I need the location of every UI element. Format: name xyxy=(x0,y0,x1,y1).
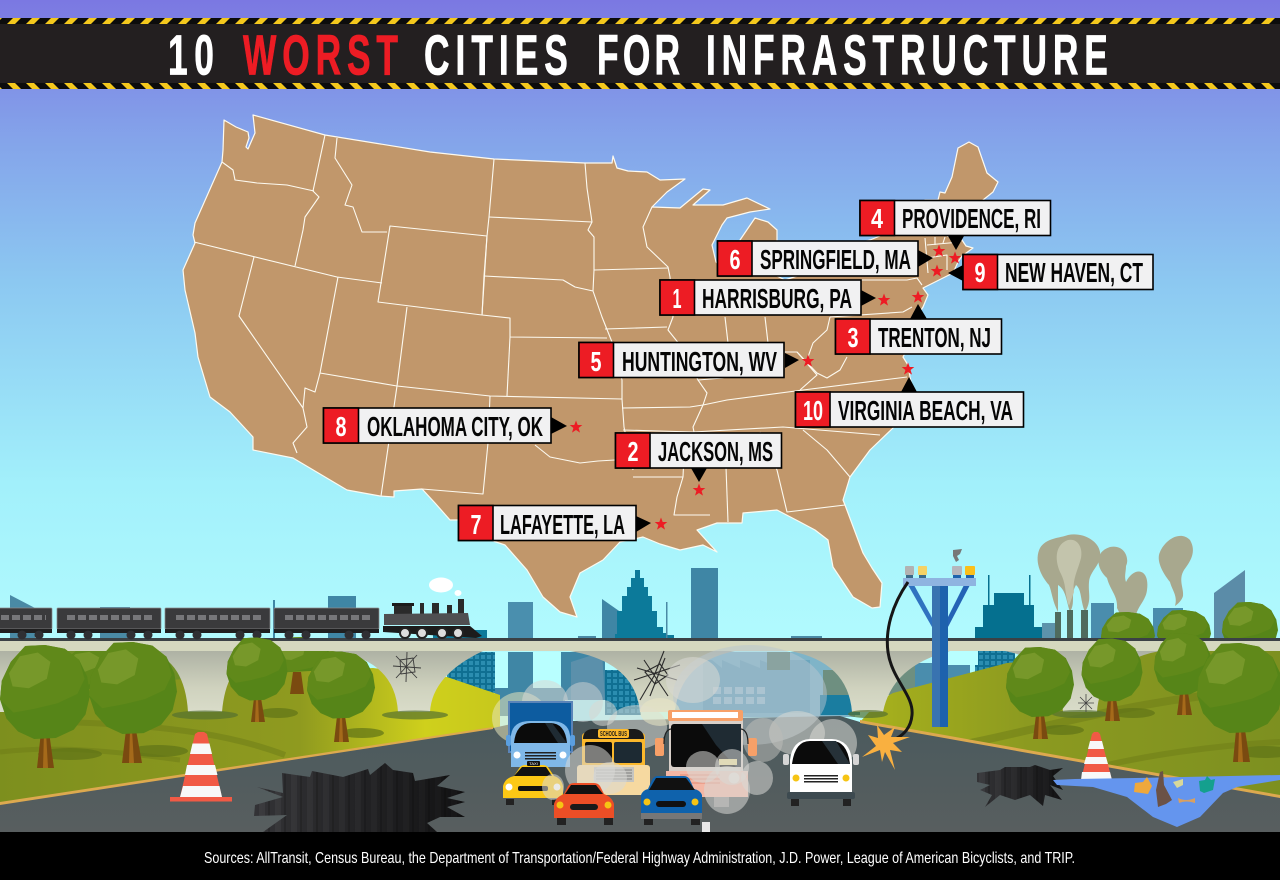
pier base shadows xyxy=(172,710,1108,720)
map of the contiguous United States xyxy=(183,115,998,617)
city label: 9 New Haven xyxy=(948,254,1153,290)
title text: 10 xyxy=(168,24,214,88)
right hillside xyxy=(860,640,1280,797)
yellow school bus xyxy=(577,729,650,795)
traffic cone right xyxy=(1073,732,1120,784)
road edge right xyxy=(860,720,1280,798)
pothole left xyxy=(254,763,465,832)
city label: 7 Lafayette xyxy=(458,506,651,540)
red star markers xyxy=(570,244,961,530)
city label: 7 Lafayette: 7 xyxy=(470,509,482,540)
left hillside xyxy=(0,668,500,806)
city label: 7 Lafayette: LAFAYETTE, LA xyxy=(500,509,625,540)
lane marks xyxy=(702,822,710,832)
tree 1 xyxy=(0,645,102,768)
traffic cone left xyxy=(170,732,232,802)
title text: CITIES xyxy=(424,24,568,88)
title text: INFRASTRUCTURE xyxy=(706,24,1108,88)
city label: 5 Huntington xyxy=(579,342,799,378)
factory silhouette in right arch xyxy=(703,660,810,713)
city label: 1 Harrisburg xyxy=(660,280,876,315)
city bus xyxy=(655,710,757,807)
carriage 2 xyxy=(57,608,161,640)
city label: 6 Springfield xyxy=(718,241,933,276)
tree 8 xyxy=(1197,643,1280,762)
tree 5 xyxy=(1006,647,1084,739)
city label: 8 Oklahoma City: 8 xyxy=(336,411,346,442)
city label: 10 Virginia Beach: VIRGINIA BEACH, VA xyxy=(838,395,1013,426)
title text: WORST xyxy=(243,24,398,88)
city label: 8 Oklahoma City: OKLAHOMA CITY, OK xyxy=(367,411,543,442)
hazard stripe top xyxy=(0,18,1280,24)
bridge deck xyxy=(0,641,1280,651)
carriage 3 xyxy=(165,608,270,640)
title text xyxy=(168,24,1108,88)
city label: 9 New Haven: NEW HAVEN, CT xyxy=(1005,257,1143,288)
city label: 3 Trenton: TRENTON, NJ xyxy=(878,322,991,353)
road xyxy=(0,716,1280,832)
tree 7 xyxy=(1154,633,1212,715)
background tree masses behind arches xyxy=(60,637,350,712)
steam locomotive xyxy=(383,599,482,638)
city label: 4 Providence: 4 xyxy=(871,203,883,234)
tree 6 xyxy=(1082,638,1155,721)
crack on right pier xyxy=(1078,694,1094,712)
city label: 6 Springfield: SPRINGFIELD, MA xyxy=(760,244,911,275)
crack on centre span xyxy=(634,651,680,700)
city label: 10 Virginia Beach xyxy=(796,377,1024,427)
pothole right xyxy=(977,765,1063,807)
yellow school bus: SCHOOL BUS xyxy=(600,731,627,738)
title banner xyxy=(0,18,1280,89)
city label: 5 Huntington: 5 xyxy=(590,346,602,377)
factory windows xyxy=(713,687,765,704)
state boundaries xyxy=(194,135,960,522)
utility pole xyxy=(903,549,976,727)
factory smoke xyxy=(1038,534,1193,618)
city label: 8 Oklahoma City xyxy=(324,408,567,443)
yellow taxi: TAXI xyxy=(529,761,538,766)
tree 3 xyxy=(226,638,298,722)
blue car xyxy=(641,776,702,825)
broken power cable xyxy=(887,582,912,738)
electric spark xyxy=(862,725,910,770)
industrial plant xyxy=(975,575,1043,638)
carriage 4 xyxy=(274,608,379,640)
hazard stripe bottom xyxy=(0,83,1280,89)
flooded puddle with debris xyxy=(1053,771,1280,827)
city label: 10 Virginia Beach: 10 xyxy=(803,395,823,426)
city label: 1 Harrisburg: HARRISBURG, PA xyxy=(702,283,852,314)
trees, right xyxy=(1006,633,1280,762)
tree 4 xyxy=(307,652,384,742)
blue box truck xyxy=(506,702,575,767)
city label: 2 Jackson: JACKSON, MS xyxy=(658,436,773,467)
city label: 1 Harrisburg: 1 xyxy=(672,283,682,314)
bridge piers xyxy=(0,651,1160,712)
city label: 3 Trenton: 3 xyxy=(848,322,858,353)
background trees behind the rail xyxy=(1101,602,1278,656)
road edge left xyxy=(0,727,493,805)
city label: 6 Springfield: 6 xyxy=(730,244,740,275)
city label: 9 New Haven: 9 xyxy=(974,257,986,288)
tree 2 xyxy=(89,642,188,763)
city skyline xyxy=(10,534,1245,641)
city label: 4 Providence: PROVIDENCE, RI xyxy=(902,203,1041,234)
sources footer xyxy=(0,832,1280,880)
traffic jam exhaust smoke xyxy=(492,645,857,767)
smoke over traffic xyxy=(542,745,773,814)
smokestacks xyxy=(1055,612,1061,638)
city label: 2 Jackson xyxy=(616,433,782,482)
carriage 1 xyxy=(0,608,52,640)
city label: 2 Jackson: 2 xyxy=(628,436,638,467)
crack on left pier xyxy=(393,652,421,682)
rail line xyxy=(0,638,1280,642)
city label: 5 Huntington: HUNTINGTON, WV xyxy=(622,346,777,377)
city label: 3 Trenton xyxy=(836,304,1002,354)
locomotive steam xyxy=(429,578,462,596)
city seen through the arches xyxy=(447,651,1015,717)
elevated bridge xyxy=(0,641,1280,720)
trees, left xyxy=(0,638,384,768)
title text: FOR xyxy=(597,24,680,88)
yellow taxi xyxy=(503,761,563,805)
white van xyxy=(783,739,859,806)
city label: 4 Providence xyxy=(860,200,1050,250)
stepped tower xyxy=(615,570,674,641)
red car xyxy=(554,783,614,825)
hillside shading bands xyxy=(0,690,1280,772)
background tree trunks on left hill xyxy=(290,672,304,694)
freight train xyxy=(0,578,482,640)
